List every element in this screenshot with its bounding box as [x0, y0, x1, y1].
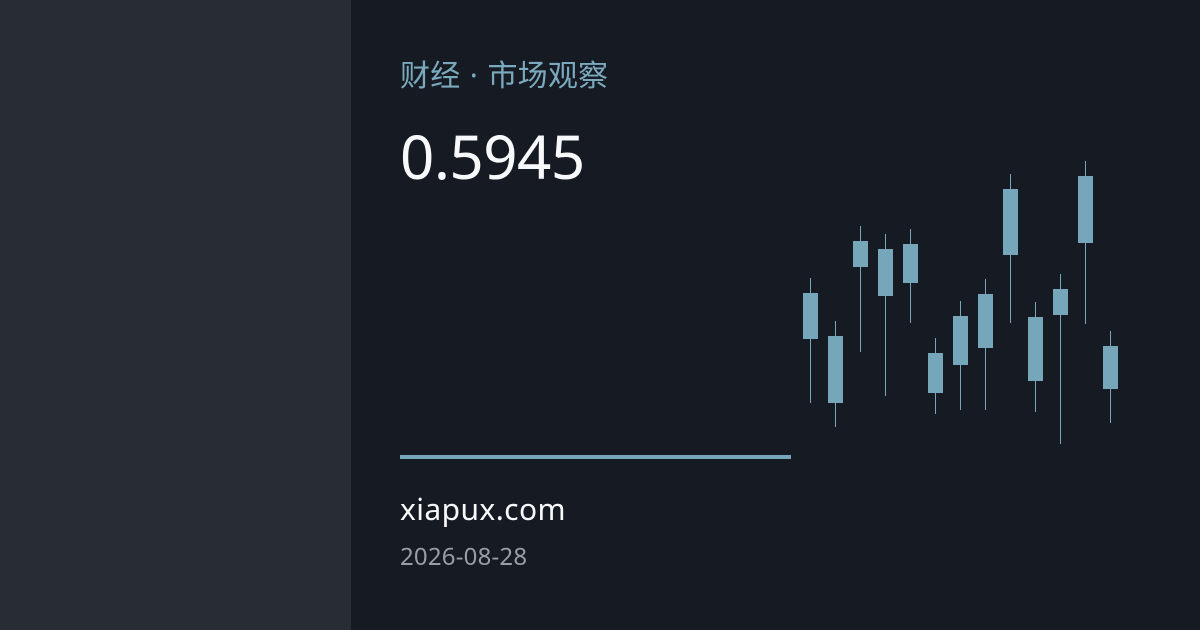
panel: left sidebar [0, 0, 351, 630]
text: site name: xiapux.com [400, 488, 566, 529]
heading: category label: 财经 · 市场观察 [400, 54, 608, 95]
title: main value: 0.5945 [400, 115, 585, 197]
accent rule [400, 455, 791, 459]
text: date: 2026-08-28 [400, 540, 527, 573]
